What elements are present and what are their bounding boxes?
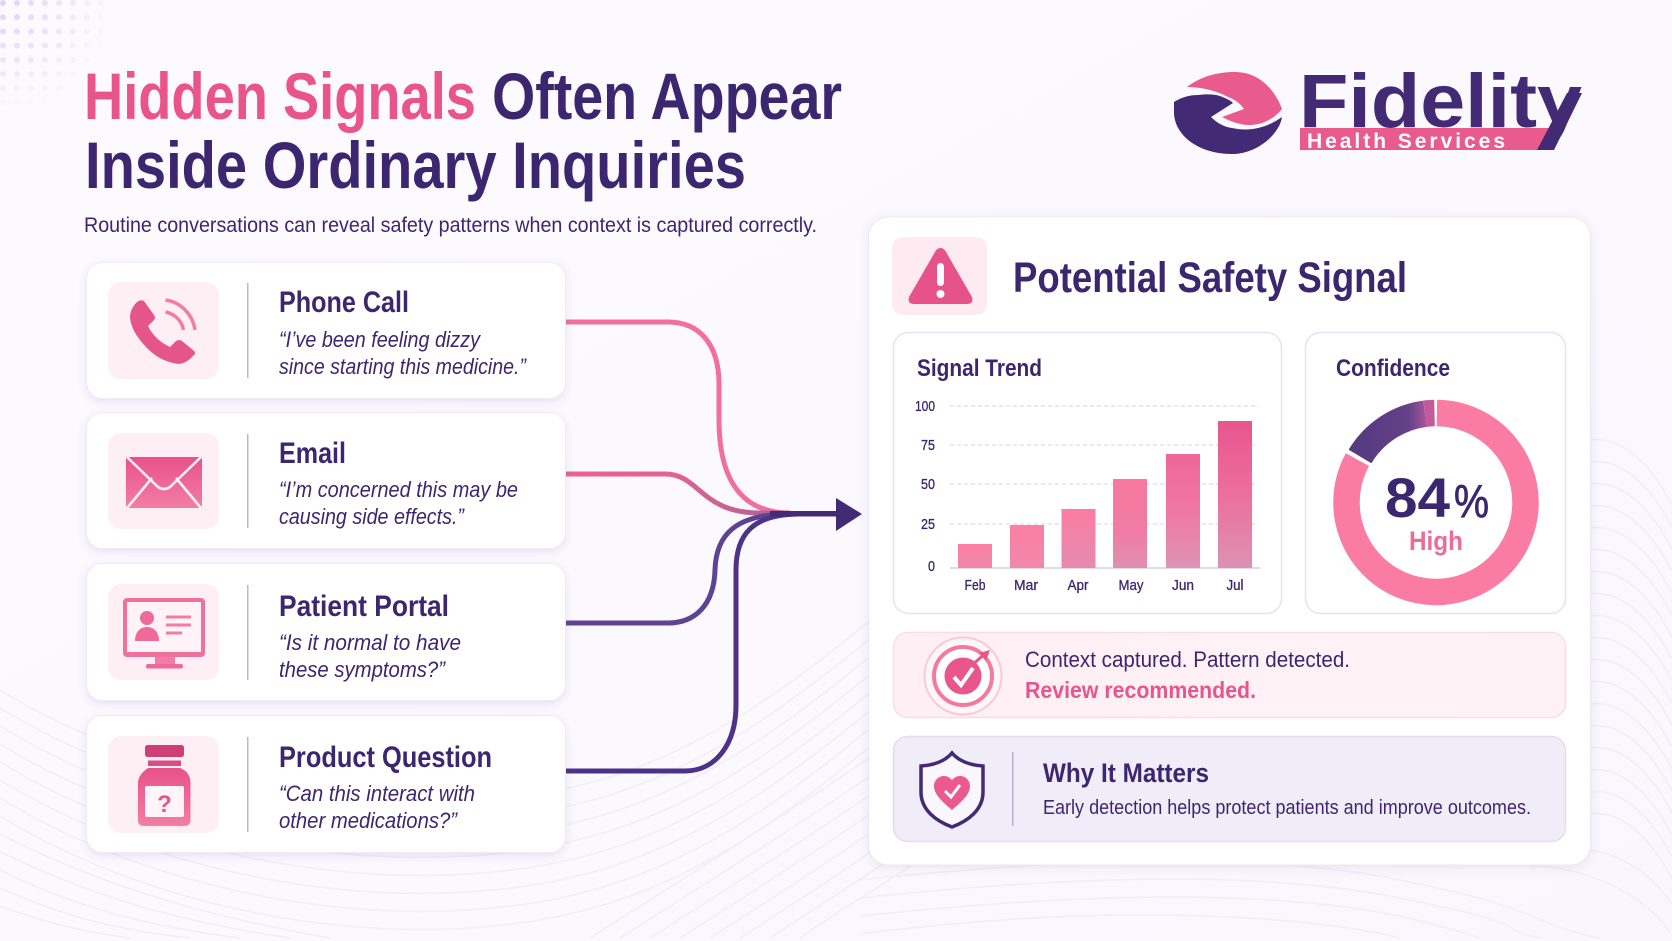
panel: signal trend bbox=[894, 332, 1282, 614]
title: Inside Ordinary Inquiries bbox=[85, 128, 746, 202]
donut chart bbox=[1345, 411, 1527, 594]
donut value bbox=[1385, 466, 1489, 556]
bar chart: Mar bbox=[1014, 577, 1038, 594]
card quote: “Is it normal to have bbox=[279, 630, 461, 655]
logo: Fidelity Health Services bbox=[1174, 59, 1582, 154]
logo tagline: Health Services bbox=[1307, 130, 1505, 153]
logo tail bbox=[1537, 93, 1582, 150]
callout: why it matters bbox=[894, 736, 1566, 842]
connector: phone call bbox=[566, 322, 790, 513]
bar chart: Apr bbox=[1068, 577, 1089, 594]
callout body: Early detection helps protect patients and improve outcomes. bbox=[1043, 797, 1531, 819]
card quote bbox=[279, 327, 527, 379]
title bbox=[84, 59, 842, 202]
subtitle: Routine conversations can reveal safety patterns when context is captured correctly. bbox=[84, 214, 817, 237]
panel: patient portal card bbox=[86, 564, 566, 700]
title: Often Appear bbox=[492, 59, 842, 133]
callout heading: Why It Matters bbox=[1043, 758, 1209, 788]
bar chart: 50 bbox=[921, 476, 935, 493]
chart heading: Signal Trend bbox=[917, 355, 1042, 382]
callout text: Review recommended. bbox=[1025, 677, 1256, 703]
bar chart: Jun bbox=[1172, 577, 1194, 594]
icon tile: envelope bbox=[108, 433, 219, 529]
card quote: these symptoms?” bbox=[279, 657, 447, 682]
bar chart: May bbox=[1118, 577, 1144, 594]
icon: shield heart bbox=[921, 753, 983, 827]
bar chart: 0 bbox=[928, 558, 935, 575]
card quote: “Can this interact with bbox=[279, 781, 475, 806]
connector: patient portal bbox=[566, 514, 790, 623]
panel: email card bbox=[86, 412, 566, 548]
connectors bbox=[566, 322, 800, 771]
card title: Phone Call bbox=[279, 286, 409, 319]
callout text: Context captured. Pattern detected. bbox=[1025, 647, 1350, 672]
donut value: 84 bbox=[1385, 466, 1450, 529]
panel: product question card bbox=[86, 716, 566, 852]
panel heading: Potential Safety Signal bbox=[1013, 254, 1407, 302]
panel: potential safety signal bbox=[868, 217, 1590, 865]
title: Hidden Signals bbox=[84, 59, 476, 133]
card quote: “I’ve been feeling dizzy bbox=[279, 327, 482, 352]
donut value: High bbox=[1409, 526, 1463, 556]
card quote: other medications?” bbox=[279, 808, 459, 833]
callout text bbox=[1025, 647, 1350, 703]
arrow bbox=[770, 498, 862, 531]
icon tile: bottle bbox=[108, 736, 219, 833]
logo mark bbox=[1174, 72, 1282, 154]
panel: confidence bbox=[1306, 332, 1566, 614]
bar chart: Feb bbox=[964, 577, 986, 594]
card quote: causing side effects.” bbox=[279, 504, 465, 529]
bar chart: Jul bbox=[1226, 577, 1244, 594]
bar chart: 75 bbox=[921, 437, 935, 454]
bar chart: 100 bbox=[915, 398, 935, 415]
logo wordmark: Fidelity bbox=[1299, 59, 1582, 144]
bar chart bbox=[915, 398, 1260, 594]
card title: Patient Portal bbox=[279, 590, 449, 623]
icon tile: phone bbox=[108, 282, 219, 379]
card title: Product Question bbox=[279, 741, 492, 774]
connector: product question bbox=[566, 514, 800, 771]
card quote bbox=[279, 477, 518, 529]
callout: context captured bbox=[894, 632, 1566, 718]
donut value: % bbox=[1454, 475, 1489, 527]
connector: email bbox=[566, 474, 790, 513]
card quote: since starting this medicine.” bbox=[279, 354, 527, 379]
icon: target check bbox=[924, 638, 1002, 714]
icon tile: bottle: ? bbox=[157, 791, 172, 818]
icon tile: monitor bbox=[108, 584, 219, 680]
card quote bbox=[279, 781, 475, 833]
bar chart: 25 bbox=[921, 516, 935, 533]
card title: Email bbox=[279, 437, 346, 470]
panel: phone call card bbox=[86, 262, 566, 398]
confidence heading: Confidence bbox=[1336, 355, 1450, 382]
card quote: “I’m concerned this may be bbox=[279, 477, 518, 502]
icon: warning bbox=[892, 237, 987, 315]
logo ribbon bbox=[1300, 128, 1552, 150]
card quote bbox=[279, 630, 461, 682]
